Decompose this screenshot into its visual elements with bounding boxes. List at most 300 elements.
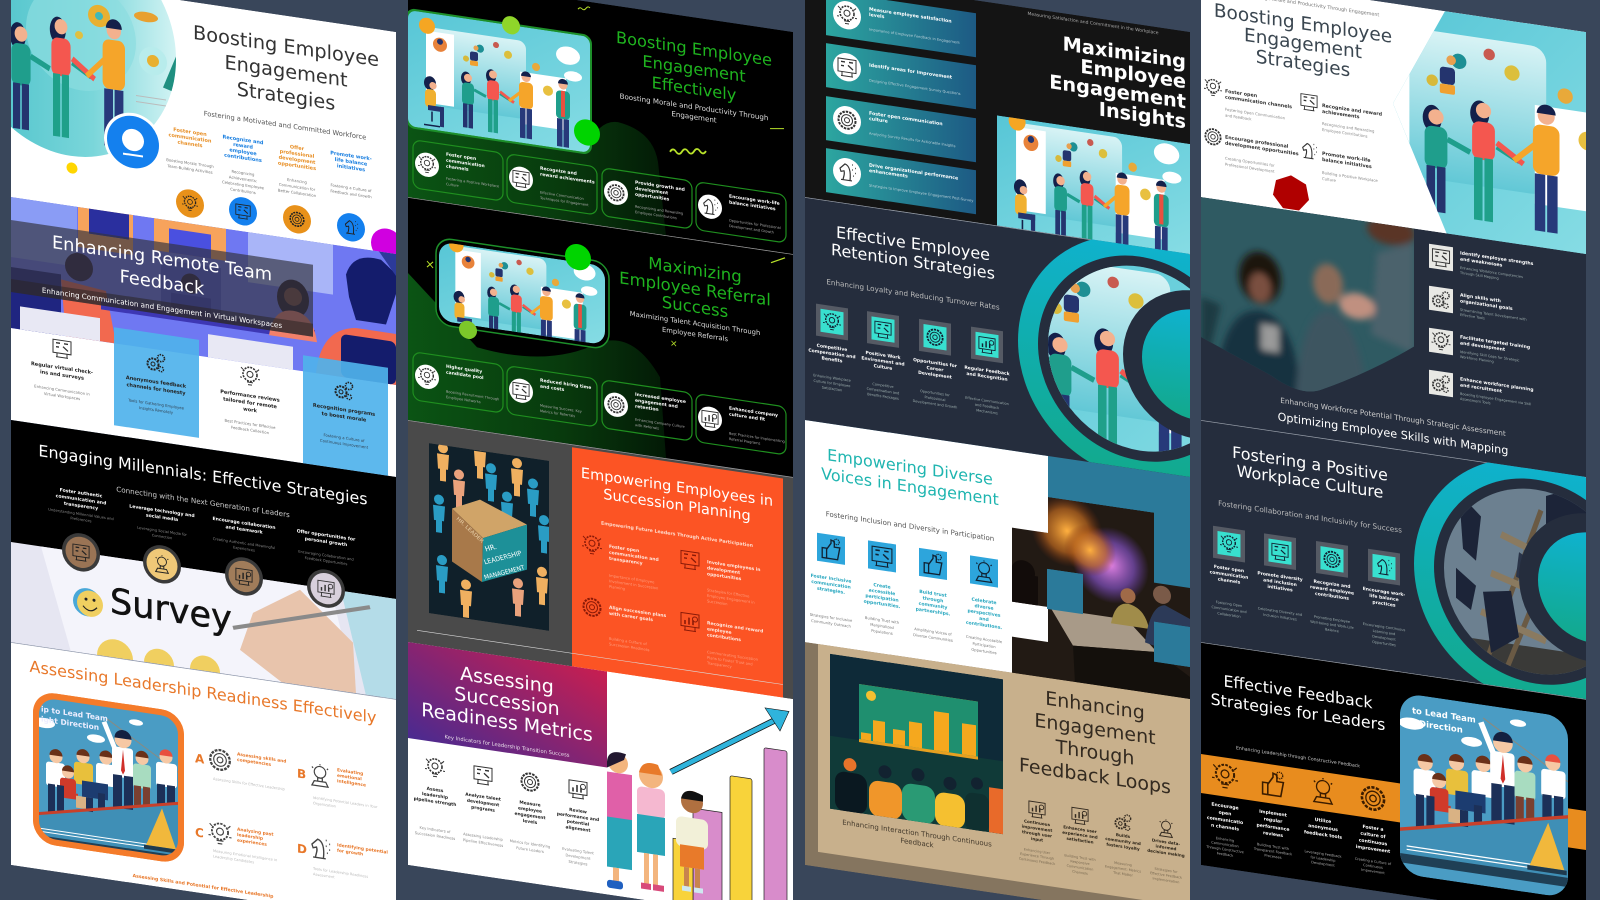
card 3: Recognizing and Rewarding	[635, 205, 683, 216]
card 3: Increased employee	[635, 392, 686, 405]
column: technology: Leverage technology and	[129, 504, 195, 519]
item: foster open communication: Importance of Employee	[609, 574, 655, 585]
column: work environment: Competitive	[872, 382, 894, 389]
item: recognize achievements: Recognize and reward	[1322, 103, 1383, 118]
item: involve employees: development	[707, 565, 741, 576]
column: data-informed decisions: Implementation	[1153, 876, 1179, 884]
teal overlay blocks	[1047, 569, 1190, 667]
subtitle: Connecting with the Next Generation of Leaders	[116, 485, 290, 519]
image: team in polygon	[1343, 0, 1600, 265]
title: Boosting Employee	[616, 28, 772, 70]
column: community and loyalty: That Matter	[1112, 870, 1134, 878]
column: continuous improvement	[1355, 785, 1392, 876]
column: diverse perspectives: diverse	[974, 603, 994, 612]
white panel	[805, 420, 1048, 679]
column: performance alignment: Strategies	[569, 860, 588, 867]
slide: Maximizing Employee Engagement Insights	[805, 0, 1190, 263]
item: targeted training: Facilitate targeted training	[1460, 334, 1530, 351]
column: recognize contributions: contributions	[224, 153, 262, 164]
column: check-ins: Regular virtual check-	[31, 361, 93, 376]
subtitle: Fostering a Motivated and Committed Workforce	[204, 110, 366, 142]
arrow: growth	[671, 694, 789, 789]
item: recognize and reward: Transparency	[706, 661, 732, 669]
photo: leadership management cube: HR. LEADER	[455, 516, 485, 545]
column: professional development: professional	[280, 149, 315, 160]
card 1: channels	[446, 164, 469, 173]
column: feedback: Regular Feedback	[964, 365, 1011, 377]
squiggle marks	[578, 5, 784, 169]
column: continuous improvement: culture of	[1360, 831, 1387, 840]
divider line	[417, 630, 783, 684]
column: work environment	[861, 310, 905, 402]
column: engagement levels: Future Leaders	[516, 846, 544, 854]
column: community and loyalty: Builds	[1116, 832, 1131, 839]
column: technology: Leveraging Social Media for	[137, 526, 187, 537]
title: Empowering Diverse	[827, 445, 993, 489]
bar 1: levels	[869, 12, 885, 20]
column: work-life: life balance	[1369, 593, 1399, 603]
column: engagement levels: levels	[523, 818, 538, 826]
column: open communication: Foster open	[1214, 564, 1244, 574]
slide: Empowering Diverse Voices	[805, 420, 1190, 700]
column: recognition: Balance	[1325, 627, 1339, 633]
card 4: Opportunities for Professional	[729, 219, 781, 230]
subtitle: Fostering Inclusion and Diversity in Participation	[826, 509, 994, 543]
item: foster open communication: Foster open	[609, 544, 639, 554]
bar 1	[826, 0, 976, 57]
column: anonymous tools: Development	[1311, 860, 1335, 868]
item: workforce planning: and recruitment	[1460, 382, 1503, 395]
column: user experience: satisfaction	[1066, 836, 1094, 845]
column: recognition: reward employee	[1310, 584, 1354, 597]
column: diverse perspectives: contributions.	[966, 620, 1002, 631]
item: professional development	[1205, 128, 1299, 177]
title: Readiness Metrics	[421, 698, 593, 746]
column: performance alignment: performance and	[557, 811, 599, 823]
column: feedback: Effective Communication	[965, 396, 1009, 406]
item: foster open communication	[582, 535, 659, 596]
card 1: Higher quality	[446, 364, 482, 375]
column: community partnerships: partnerships.	[916, 606, 951, 618]
bar 2: Identify areas for improvement	[869, 62, 953, 81]
title: Engagement	[224, 51, 348, 92]
item A: A	[195, 751, 205, 767]
column: anonymous feedback: Anonymous feedback	[126, 375, 187, 390]
column: user experience: Enhances user	[1063, 824, 1098, 834]
column: recognize contributions	[222, 134, 265, 229]
column: work-life: Encourage work-	[1363, 586, 1405, 598]
column: performance alignment: potential	[567, 819, 590, 828]
column: continuous improvement: through user	[1022, 829, 1053, 839]
column: continuous improvement: Foster a	[1362, 824, 1384, 833]
column: collaboration: Experiences	[233, 545, 255, 553]
column: work-life balance	[330, 150, 372, 244]
column: accessible participation: Marginalized	[870, 623, 894, 630]
title: Feedback	[120, 266, 205, 300]
column: anonymous tools	[1304, 775, 1342, 869]
title: Effective Employee	[836, 223, 990, 264]
column: recognize contributions: Achievements:	[229, 174, 257, 183]
orange panel	[572, 447, 783, 698]
column: talent programs: Pipeline Effectiveness	[463, 838, 503, 848]
item: align skills: Streamlining Talent Development with	[1460, 308, 1527, 322]
subtitle: Empowering Future Leaders Through Active Participation	[601, 521, 753, 549]
column: work-life balance: initiatives	[337, 163, 365, 173]
title: Strategies for Leaders	[1211, 690, 1385, 734]
ring graphic with ladder photo	[1414, 442, 1600, 723]
ring graphic with team scene	[967, 211, 1277, 501]
item: open communication: and Feedback	[1225, 113, 1252, 122]
tan panel	[818, 644, 1190, 900]
icon: blue globe circle	[104, 112, 159, 168]
column: technology: social media	[146, 512, 178, 523]
column: career: Development	[918, 370, 953, 381]
column: professional development: Communication for	[279, 182, 316, 192]
title: Maximizing	[648, 254, 742, 286]
item: align skills: Effective Tools	[1460, 313, 1485, 321]
column: user experience: Communication	[1067, 864, 1093, 872]
item: foster open communication: communication and	[609, 550, 659, 563]
image: leader team in orange frame	[33, 690, 184, 865]
item: work-life balance: Building a Positive Workplace	[1322, 170, 1378, 183]
column: open communication: communicatio	[1207, 815, 1243, 826]
bar 1: Measure employee satisfaction	[869, 6, 952, 25]
subtitle: Enhancing Loyalty and Reducing Turnover Rates	[826, 277, 1000, 312]
card 4: balance initiatives	[729, 200, 776, 212]
top caption: Measuring Satisfaction and Commitment in the Workplace	[1027, 11, 1159, 36]
column: continuous improvement: improvement	[1022, 824, 1052, 833]
item C: Measuring Emotional Intelligence in	[213, 849, 277, 862]
column: performance reviews: work	[243, 406, 258, 414]
bar 2: Designing Effective Engagement Survey Questions	[869, 78, 961, 96]
item: involve employees	[681, 550, 761, 611]
item: open communication: Fostering Open Communication	[1225, 107, 1286, 121]
title: Enhancing	[1045, 687, 1145, 724]
column: career: Career	[927, 365, 944, 374]
item: professional development: Creating Opportunities for	[1225, 156, 1275, 168]
column: user experience: Building Trust with	[1064, 853, 1096, 862]
column: continuous improvement	[1019, 799, 1055, 866]
column: work-life balance: life balance	[335, 157, 368, 168]
bar 4	[826, 148, 976, 214]
column: diversity	[1257, 532, 1303, 623]
title: Employee Referral	[619, 268, 771, 310]
card 1: communication	[446, 158, 485, 169]
item: recognize achievements	[1301, 94, 1383, 141]
title overlay	[11, 220, 313, 337]
illustration: remote office scene	[11, 197, 396, 385]
column: diversity: and inclusion	[1263, 577, 1297, 588]
item: align succession plans	[584, 597, 666, 655]
column: performance alignment: Evaluating Talent	[562, 847, 594, 856]
title: Fostering a Positive	[1232, 443, 1388, 485]
item: align skills	[1429, 286, 1527, 327]
card 3	[602, 380, 692, 441]
column: open communication: Communication	[1211, 841, 1239, 849]
column: authentic communication: Understanding Millennial Values and	[48, 508, 114, 521]
column: diversity: Celebrating Diversity and	[1258, 606, 1302, 617]
column: accessible participation: accessible	[869, 587, 895, 597]
subtitle: Enhancing Leadership through Constructive Feedback	[1236, 745, 1360, 770]
column: work-life balance: Fostering a Culture of	[331, 182, 372, 193]
column: performance reviews	[220, 363, 280, 437]
column: diversity: Promote diversity	[1257, 570, 1303, 583]
item: align succession plans: with career goals	[609, 611, 653, 623]
column: check-ins: Virtual Workspaces	[44, 391, 80, 401]
item: targeted training	[1429, 328, 1530, 369]
column: continuous improvement: Experience Through	[1020, 852, 1054, 861]
column: professional development: Offer	[290, 144, 305, 152]
column: feedback: and Feedback	[975, 403, 1000, 410]
item: strengths: Identify employee strengths	[1460, 250, 1534, 267]
column: feedback	[964, 326, 1011, 417]
item D: Assessment	[313, 872, 335, 879]
item: recognize achievements: Recognizing and Rewarding	[1322, 121, 1375, 134]
column: talent programs: Assessing Leadership	[463, 832, 504, 842]
column: talent programs	[463, 764, 504, 848]
column: community partnerships: Amplifying Voices of	[914, 627, 952, 637]
title: Optimizing Employee Skills with Mapping	[1278, 410, 1508, 457]
column: collaboration	[213, 516, 275, 600]
title: Engaging Millennials: Effective Strategies	[38, 441, 368, 509]
column: authentic communication: Foster authentic	[60, 487, 103, 500]
column: continuous improvement: continuous	[1359, 837, 1388, 848]
column: recognition programs: Recognition programs	[313, 403, 375, 418]
column: recognize contributions: employee	[229, 147, 257, 157]
column: recognize contributions: Contributions	[230, 186, 256, 195]
column: engagement levels: Measure	[519, 800, 541, 809]
column: work-life balance: Feedback and Growth	[330, 188, 372, 199]
column: anonymous tools: Utilize	[1315, 817, 1331, 825]
column: community partnerships	[913, 547, 953, 643]
slide: Maximizing Employee Referral Success (neon)	[408, 197, 793, 477]
image: leader team in orange frame: ip to Lead Team	[41, 704, 108, 723]
photo: survey on paper	[11, 542, 396, 699]
column: regular reviews: regular	[1264, 816, 1283, 825]
item B: Identifying Potential Leaders in Your	[313, 796, 378, 809]
subtitle: Engagement	[671, 109, 717, 125]
column: diverse perspectives	[966, 555, 1003, 656]
column: foster open communication: communication	[169, 132, 212, 145]
item: foster open communication: Planning	[609, 585, 626, 591]
title: Enhancing Remote Team	[52, 232, 272, 286]
column: foster open communication: Team-Building Activities	[166, 163, 213, 175]
subtitle: Enhancing Workforce Potential Through Strategic Assessment	[1280, 396, 1506, 438]
column: data-informed decisions: informed	[1156, 843, 1176, 851]
card 3: engagement and	[635, 398, 678, 410]
title: Effectively	[652, 73, 737, 105]
decorative cross marks	[425, 205, 785, 366]
column: regular reviews: Processes	[1264, 853, 1282, 860]
column: work environment: Environment and	[861, 355, 905, 368]
item D: Tools for Leadership Readiness	[312, 867, 368, 879]
green glow shape	[408, 273, 666, 458]
item: recognize achievements: achievements	[1322, 109, 1360, 120]
subtitle band	[11, 279, 313, 337]
column: work-life: Development	[1372, 634, 1396, 642]
green glow shape	[408, 91, 666, 236]
column: accessible participation: participation	[865, 593, 899, 604]
column: diverse perspectives: Celebrate	[971, 597, 997, 606]
column: career: Professional	[925, 395, 945, 402]
title: Success	[662, 293, 728, 321]
column: pipeline: Assess	[427, 786, 444, 794]
item: work-life balance: Culture	[1322, 176, 1336, 183]
image: audience watching bar chart	[830, 654, 1003, 835]
item: recognize and reward: contributions	[707, 632, 741, 643]
column: work environment: Compensation and	[867, 387, 899, 395]
slide: Enhancing Engagement Through Feedback Loops	[805, 642, 1190, 900]
column: regular reviews: Transparent Feedback	[1253, 847, 1293, 857]
column: open communication: communication	[1210, 569, 1248, 581]
item: targeted training: Identifying Skill Gaps for Strategic	[1460, 350, 1520, 363]
column: open communication: Collaboration	[1217, 611, 1241, 619]
photo: leadership management cube: HR.	[483, 542, 498, 553]
image: leader team	[1399, 692, 1574, 899]
column: user experience	[1062, 806, 1098, 877]
column: inclusive communication: Strategies for Inclusive	[810, 613, 853, 623]
column: authentic communication	[48, 486, 114, 576]
slide: Boosting Employee Engagement Strategies (hexagon)	[1201, 0, 1600, 265]
item C: Leadership Candidates	[213, 854, 254, 864]
column: continuous improvement: Creating a Culture of	[1355, 857, 1392, 866]
column: data-informed decisions	[1147, 817, 1185, 885]
card 4	[696, 182, 786, 243]
title: Through	[1055, 735, 1134, 770]
subtitle: Key Indicators for Leadership Transition Success	[445, 734, 570, 759]
column: performance reviews: tailored for remote	[223, 396, 277, 410]
item: strengths: Through Skill Mapping	[1459, 271, 1499, 281]
subtitle: Boosting Morale and Productivity Through	[620, 91, 768, 122]
column: career: Opportunities for	[920, 389, 950, 398]
column: professional development: Better Collaboration	[278, 188, 317, 198]
column: anonymous feedback: Insights Remotely	[139, 405, 174, 415]
decorative circles	[459, 227, 591, 357]
card 3: Enhancing Company Culture	[635, 418, 685, 429]
column: regular reviews: reviews	[1263, 830, 1283, 839]
column: performance alignment: Development	[566, 853, 591, 861]
column: recognition: Promoting Employee	[1314, 615, 1350, 624]
item: recognize achievements: Employee Contributions	[1322, 127, 1368, 139]
column: community and loyalty	[1105, 812, 1141, 879]
card 4: Best Practices for Implementing	[729, 432, 785, 444]
footer caption: Assessing Skills and Potential for Effective Leadership	[133, 873, 274, 900]
slide: Effective Employee Retention Strategies	[805, 187, 1277, 501]
gradient header panel	[408, 642, 607, 767]
item: strengths: Enhancing Workforce Competencies	[1460, 266, 1523, 279]
column: continuous improvement: Continuous Feedback	[1019, 857, 1055, 866]
image: leader team: to Lead Team	[1412, 706, 1476, 726]
column: open communication: Fostering Open	[1216, 600, 1242, 608]
column: technology	[129, 504, 195, 588]
card 3: retention	[635, 404, 659, 413]
column: user experience: Channels	[1072, 870, 1088, 876]
item A	[195, 745, 286, 792]
column: professional development: opportunities	[278, 161, 316, 172]
photo: leadership management cube	[429, 433, 550, 631]
column: diversity: initiatives	[1267, 584, 1293, 594]
title: Empowering Employees in	[581, 465, 773, 510]
title: Engagement	[642, 52, 746, 86]
column: inclusive communication: communication	[811, 579, 851, 591]
item: strengths: and weaknesses	[1460, 256, 1503, 269]
item B: Evaluating	[337, 767, 363, 777]
item: align succession plans: Align succession plans	[609, 605, 666, 619]
column: foster open communication: channels	[177, 140, 203, 149]
item C: leadership	[237, 832, 263, 842]
item: workforce planning: Enhance workforce planning	[1460, 376, 1534, 393]
column: diverse perspectives: Creating Accessible	[966, 635, 1003, 644]
column: career: Development and Growth	[913, 399, 957, 410]
slide: Assessing Leadership Readiness	[11, 642, 396, 900]
column: personal growth	[297, 528, 356, 612]
column: foster open communication	[166, 126, 214, 221]
column: accessible participation: opportunities.	[864, 599, 901, 610]
column: open communication: Encourage	[1211, 802, 1239, 812]
photo: team at glowing table	[1011, 486, 1190, 700]
column: anonymous feedback: Tools for Gathering Employee	[127, 397, 185, 411]
kid illustrations	[607, 751, 708, 900]
column: diverse perspectives: and	[979, 616, 989, 623]
column: open communication: open	[1219, 811, 1231, 817]
column: collaboration: Creating Authentic and Meaningful	[213, 537, 275, 550]
column: recognize contributions: Celebrating Employee	[222, 179, 265, 191]
title: Succession	[454, 682, 560, 720]
item D: D	[297, 841, 307, 857]
item A: competencies	[237, 757, 272, 768]
item A: Assessing skills and	[237, 751, 286, 765]
title: Boosting Employee	[193, 21, 379, 71]
item C: C	[195, 825, 204, 841]
card 1: Employee Networks	[446, 395, 481, 404]
photo: survey on paper: Survey	[110, 581, 232, 640]
decorative red polygon	[1273, 173, 1309, 212]
column: personal growth: Offer opportunities for	[297, 528, 356, 543]
item: targeted training: Workforce Planning	[1460, 355, 1494, 364]
slide: Optimizing Employee Skills with Mapping	[1201, 189, 1586, 477]
blue column panel 2	[114, 327, 199, 438]
bar 3: culture	[869, 116, 888, 125]
decorative yellow dot	[66, 162, 78, 174]
slide: Effective Feedback Strategies for Leaders	[1201, 642, 1586, 900]
column: recognition programs: to boost morale	[322, 411, 367, 424]
column: anonymous tools: anonymous	[1308, 824, 1338, 833]
item: work-life balance	[1303, 143, 1378, 189]
card 1: Boosting Recruitment Through	[446, 390, 499, 402]
title: Succession Planning	[603, 486, 751, 525]
column: recognition programs	[313, 377, 375, 451]
column: regular reviews: Implement	[1259, 809, 1288, 819]
column: recognition: contributions	[1315, 591, 1349, 602]
item B	[298, 764, 378, 808]
bar 2	[826, 43, 976, 109]
column: talent programs: development	[467, 798, 499, 808]
card 4: culture and fit	[729, 412, 766, 423]
illustration: handshake team blob	[11, 0, 176, 157]
column: open communication	[1205, 762, 1244, 859]
column: pipeline: Succession Readiness	[415, 831, 455, 841]
column: personal growth: Encouraging Collaboration and	[298, 550, 354, 562]
item: recognize and reward	[681, 612, 763, 674]
column: compensation: Culture for Employee	[814, 379, 850, 388]
title: Employee	[1080, 55, 1186, 93]
column: pipeline: Key Indicators of	[420, 826, 451, 834]
item D: for growth	[337, 848, 363, 858]
column: work environment: Culture	[874, 363, 892, 372]
column: foster open communication: Boosting Morale Through	[166, 157, 214, 169]
card 1: Culture	[446, 182, 459, 188]
column: data-informed decisions: Effective Feedback	[1150, 871, 1182, 880]
